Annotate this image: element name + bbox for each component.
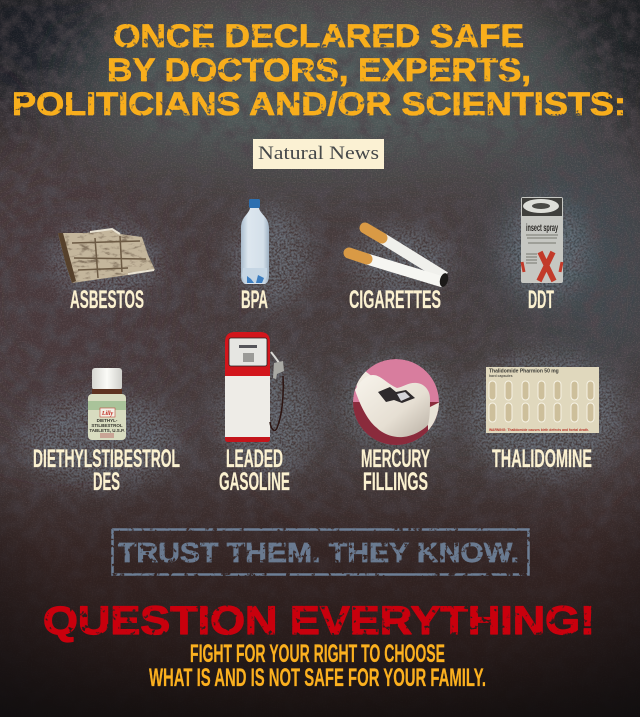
label: DDT: DDT bbox=[528, 286, 554, 314]
label: mercury fillings bbox=[361, 445, 430, 496]
logo: Natural News bbox=[253, 139, 384, 169]
label: DES: DES bbox=[93, 468, 120, 496]
icon: pill bottle: Lilly bbox=[101, 411, 113, 417]
label: mercury fillings: MERCURY bbox=[361, 445, 430, 473]
item: mercury fillings bbox=[353, 359, 439, 490]
title: ONCE DECLARED SAFE bbox=[113, 18, 524, 54]
label: leaded gasoline: LEADED bbox=[226, 445, 283, 473]
stamp: trust them, they know: TRUST THEM. THEY KNOW. bbox=[118, 537, 519, 568]
headline: question everything: QUESTION EVERYTHING! bbox=[43, 599, 595, 643]
closing message: FIGHT FOR YOUR RIGHT TO CHOOSE bbox=[190, 640, 445, 668]
title: BY DOCTORS, EXPERTS, bbox=[107, 52, 531, 88]
pale blotches behind the items bbox=[20, 200, 625, 486]
item: asbestos bbox=[58, 229, 155, 314]
icon: two cigarettes bbox=[349, 228, 450, 288]
icon: plastic bottle bbox=[241, 199, 269, 284]
icon: blister pack bbox=[486, 367, 599, 433]
title: POLITICIANS AND/OR SCIENTISTS: bbox=[12, 86, 626, 122]
label: leaded gasoline: GASOLINE bbox=[219, 468, 290, 496]
icon: asbestos chunk bbox=[58, 229, 155, 283]
icon: fuel pump bbox=[225, 332, 284, 442]
item: diethylstilbestrol bbox=[33, 368, 180, 496]
icon: blister pack: hard capsules bbox=[489, 374, 513, 378]
logo: Natural News: Natural News bbox=[258, 143, 379, 164]
item: cigarettes bbox=[349, 228, 450, 314]
icon: pill bottle bbox=[88, 368, 126, 440]
item: BPA bbox=[241, 199, 269, 314]
label: cigarettes: CIGARETTES bbox=[349, 286, 441, 314]
icon: pill bottle: TABLETS, U.S.P. bbox=[89, 428, 125, 433]
icon: pill bottle: DIETHYL- bbox=[97, 418, 118, 423]
icon: blister pack: WARNING: Thalidomide causes birth defects and foetal death. bbox=[489, 428, 589, 432]
label: BPA: BPA bbox=[241, 286, 268, 314]
closing message bbox=[149, 640, 486, 692]
stamp: trust them, they know bbox=[112, 530, 528, 574]
icon: blister pack: Thalidomide Pharmion 50 mg bbox=[489, 368, 559, 374]
item: leaded gasoline bbox=[219, 332, 290, 496]
icon: tooth with filling bbox=[350, 359, 442, 446]
title bbox=[12, 18, 626, 122]
item: thalidomine bbox=[486, 367, 599, 473]
icon: insect spray tin: insect spray bbox=[526, 223, 558, 234]
label: diethylstibestrol: DIETHYLSTIBESTROL bbox=[33, 445, 180, 473]
item: DDT bbox=[521, 197, 563, 314]
label: mercury fillings: FILLINGS bbox=[363, 468, 428, 496]
label: leaded gasoline bbox=[219, 445, 290, 496]
label: asbestos: ASBESTOS bbox=[70, 286, 144, 314]
icon: pill bottle: STILBESTROL bbox=[91, 423, 123, 428]
